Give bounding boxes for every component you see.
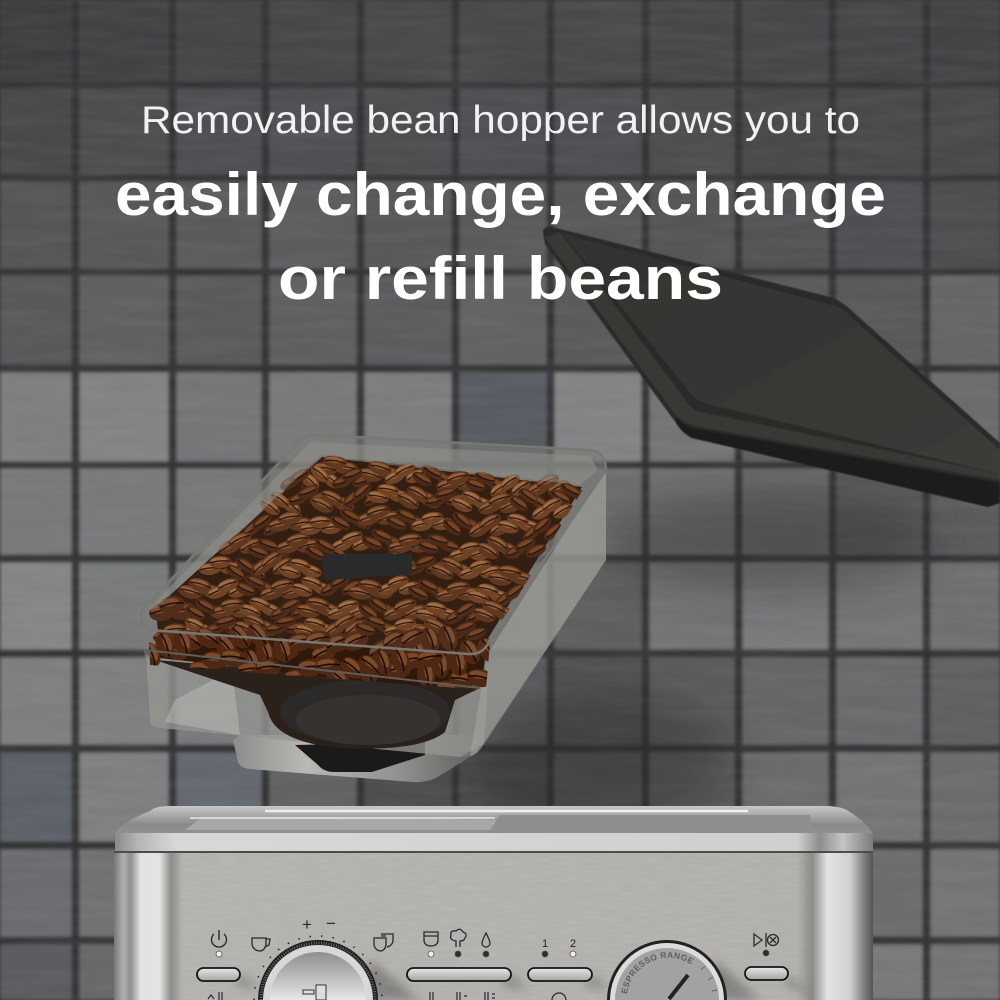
bean bed (149, 455, 582, 688)
lower row icons (208, 992, 566, 1000)
gauge needle (669, 975, 688, 999)
dark selector tab in the beans (322, 554, 412, 580)
lid underside edge (676, 416, 1000, 507)
gauge label: ESPRESSO RANGE (621, 952, 694, 994)
double cup icon (374, 934, 393, 951)
control shadows (235, 960, 810, 1000)
lid of the bean hopper (543, 227, 1000, 507)
temperature dial with knurled ring (254, 936, 382, 1000)
headline line 1: Removable bean hopper allows you to (141, 99, 860, 142)
machine front band (115, 833, 873, 852)
single cup icon (252, 938, 270, 951)
machine top tray (115, 806, 873, 852)
shot selection numbers: 1 (542, 938, 548, 950)
pressure gauge (607, 940, 727, 1000)
control panel: − (326, 914, 336, 933)
lid outer shell (543, 227, 1000, 507)
headline (115, 99, 886, 312)
back wall highlight (148, 442, 598, 610)
removable bean hopper (138, 435, 606, 782)
beverage icons (424, 929, 490, 947)
control panel (196, 914, 789, 1000)
lid front rim (545, 232, 1000, 480)
lid top surface (563, 234, 1000, 474)
hopper front lower glass (146, 655, 488, 757)
push buttons (197, 967, 788, 981)
hopper lower cup (233, 735, 478, 782)
plus and minus text: + (302, 915, 312, 934)
espresso machine (114, 806, 873, 1000)
shot selection numbers: 2 (570, 938, 576, 950)
indicator lights row (216, 950, 769, 957)
headline line 3: or refill beans (278, 245, 723, 312)
shot selection numbers (542, 938, 576, 950)
headline line 2: easily change, exchange (115, 161, 886, 228)
start stop icon (754, 933, 778, 947)
hopper rim outline (141, 435, 606, 654)
hopper glass back and side (141, 435, 606, 757)
power icon (211, 930, 226, 947)
brushed steel body (114, 851, 873, 1000)
dark funnel inside the hopper (155, 660, 480, 749)
hopper side wall (470, 468, 606, 756)
